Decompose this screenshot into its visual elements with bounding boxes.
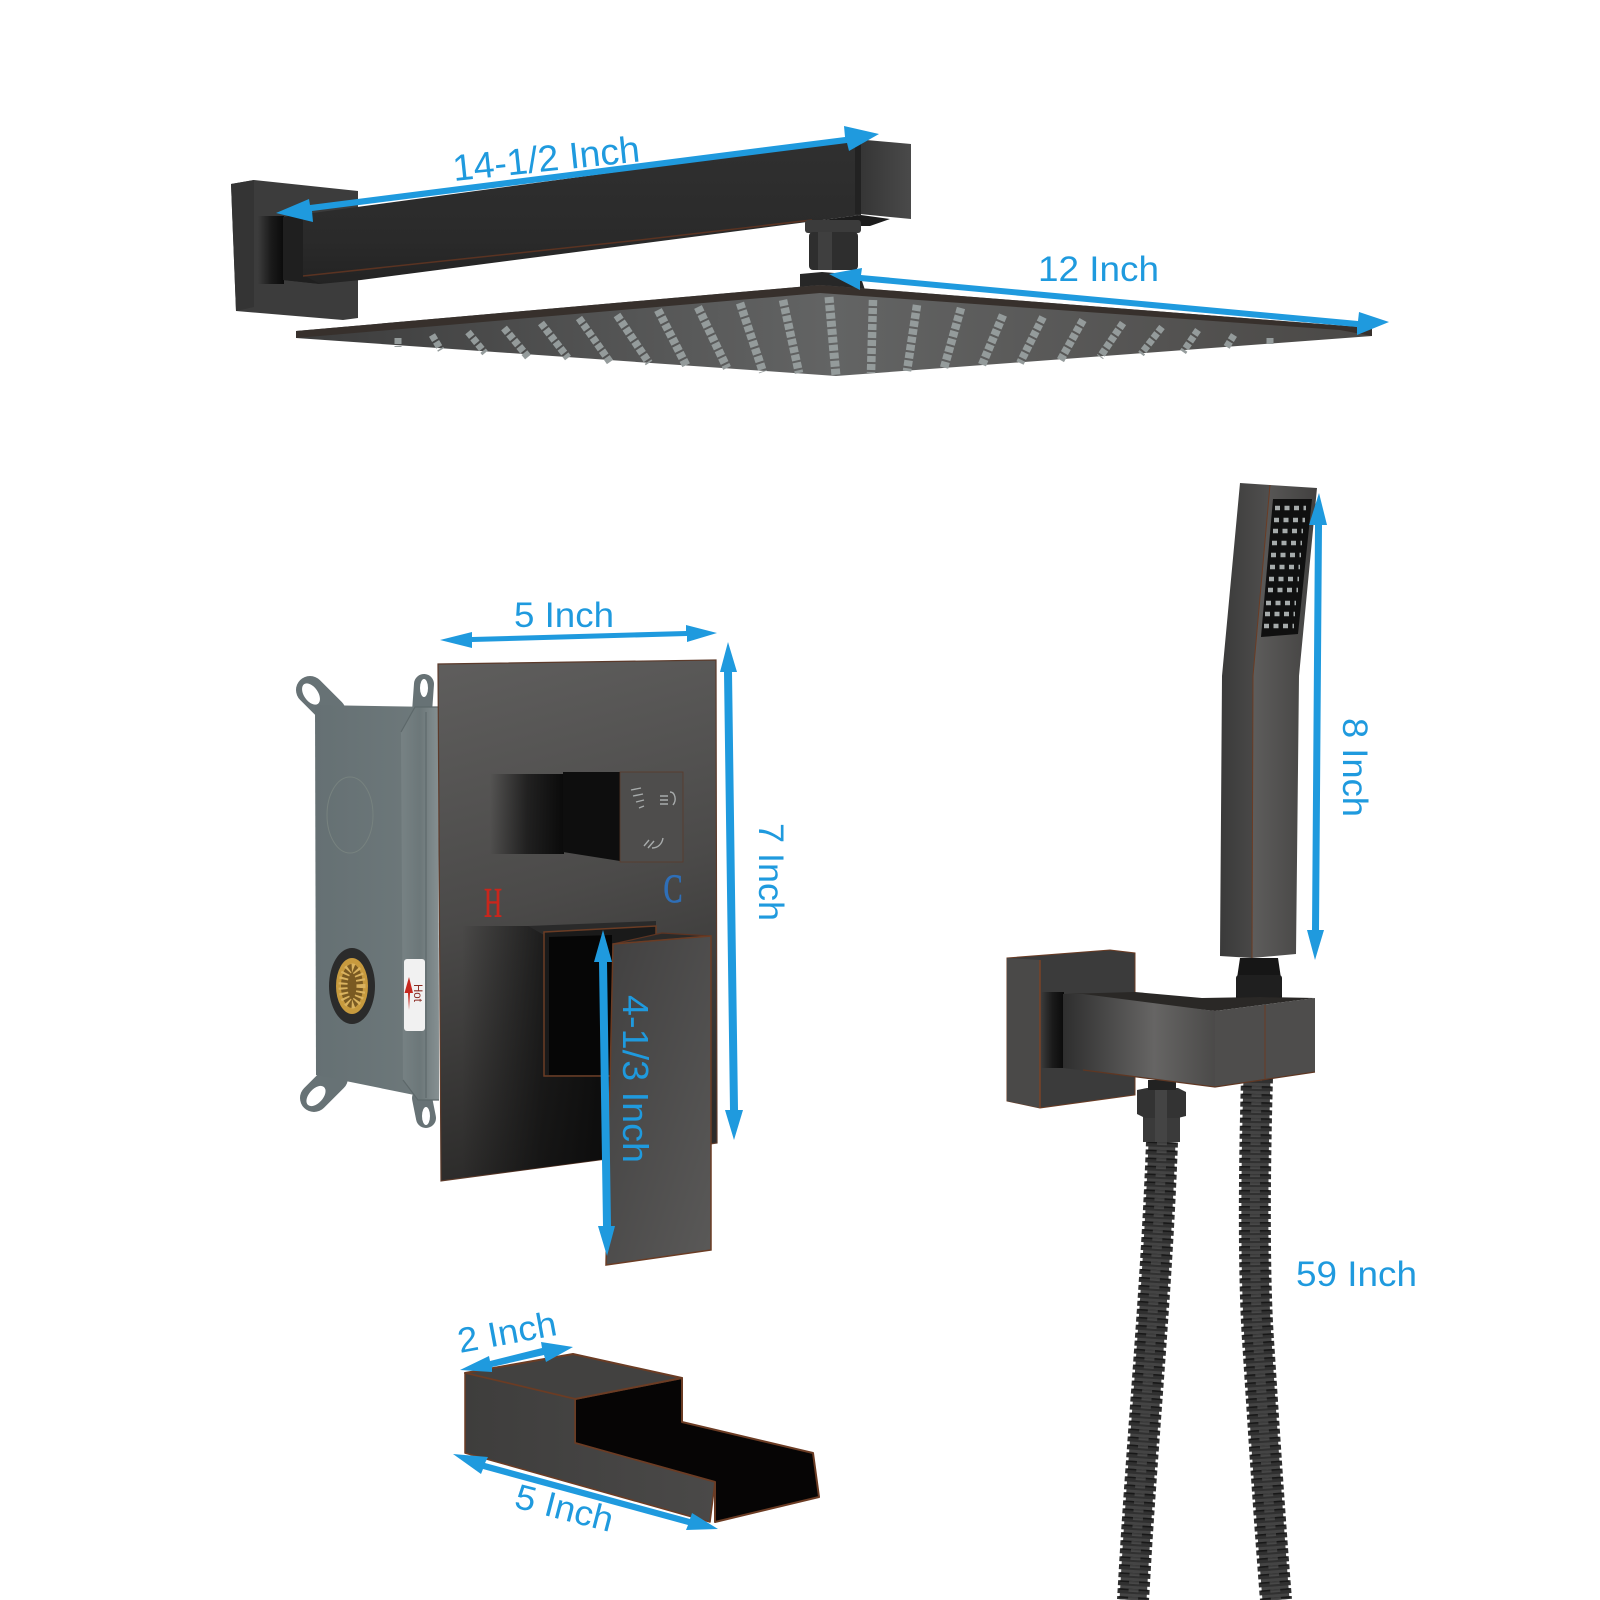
H marker: H bbox=[484, 881, 502, 927]
label: 12 Inch: 12 Inch bbox=[1038, 250, 1159, 289]
knob function icons bbox=[631, 788, 675, 848]
hot sticker: Hot bbox=[411, 984, 423, 1003]
rough-in valve box bbox=[298, 679, 439, 1125]
spray face bbox=[1261, 499, 1312, 637]
label: 59 Inch: 59 Inch bbox=[1296, 1255, 1417, 1294]
product: hand shower, holder and hose bbox=[1007, 483, 1317, 1600]
label: 4-1/3 Inch: 4-1/3 Inch bbox=[615, 995, 656, 1163]
label: 14-1/2 Inch: 14-1/2 Inch bbox=[451, 129, 642, 189]
arrow: trim height bbox=[720, 642, 743, 1140]
product: in-wall valve and trim bbox=[298, 660, 717, 1265]
spout top face bbox=[465, 1354, 682, 1399]
arrow: lever length bbox=[594, 930, 615, 1256]
trim plate bbox=[438, 660, 717, 1181]
mounting ears bbox=[310, 684, 426, 1118]
dimension arrows and labels bbox=[276, 126, 1417, 1540]
product: ceiling shower arm and rain head bbox=[231, 139, 1372, 376]
arrow: arm length bbox=[276, 126, 879, 222]
arrow: hand shower length bbox=[1307, 493, 1327, 960]
arrow: spout length bbox=[453, 1454, 718, 1530]
spout side face bbox=[465, 1373, 715, 1522]
spray nozzles bbox=[1264, 508, 1306, 626]
holder bracket bbox=[1063, 992, 1315, 1087]
wall plate bbox=[1007, 950, 1135, 1108]
shower arm bbox=[283, 139, 911, 284]
arrow: spout width bbox=[460, 1342, 573, 1372]
brass water inlet bbox=[329, 948, 375, 1024]
infographic canvas bbox=[231, 126, 1415, 1600]
C marker: C bbox=[664, 866, 682, 911]
hand shower body bbox=[1220, 483, 1317, 958]
arrow: trim width bbox=[440, 625, 717, 648]
mixer lever handle bbox=[462, 921, 711, 1265]
nozzles bbox=[398, 297, 1270, 376]
product: waterfall tub spout bbox=[465, 1354, 819, 1522]
hot sticker bbox=[404, 959, 425, 1031]
diverter knob bbox=[490, 772, 683, 862]
spout interior bbox=[575, 1378, 819, 1522]
holder swivel bbox=[1236, 958, 1282, 998]
label: 2 Inch: 2 Inch bbox=[454, 1304, 560, 1361]
rain shower head plate bbox=[296, 285, 1372, 376]
wall plate bbox=[231, 180, 358, 320]
left hose bbox=[1133, 1142, 1162, 1600]
arrow: head width bbox=[829, 268, 1389, 335]
label: 5 Inch bottom: 5 Inch bbox=[511, 1477, 618, 1540]
label: 8 Inch: 8 Inch bbox=[1335, 718, 1374, 817]
label: 7 Inch: 7 Inch bbox=[751, 823, 790, 921]
hose connector nut bbox=[1137, 1080, 1186, 1142]
right hose bbox=[1255, 1078, 1276, 1600]
swivel joint bbox=[800, 220, 865, 290]
label: 5 Inch top: 5 Inch bbox=[514, 596, 614, 635]
